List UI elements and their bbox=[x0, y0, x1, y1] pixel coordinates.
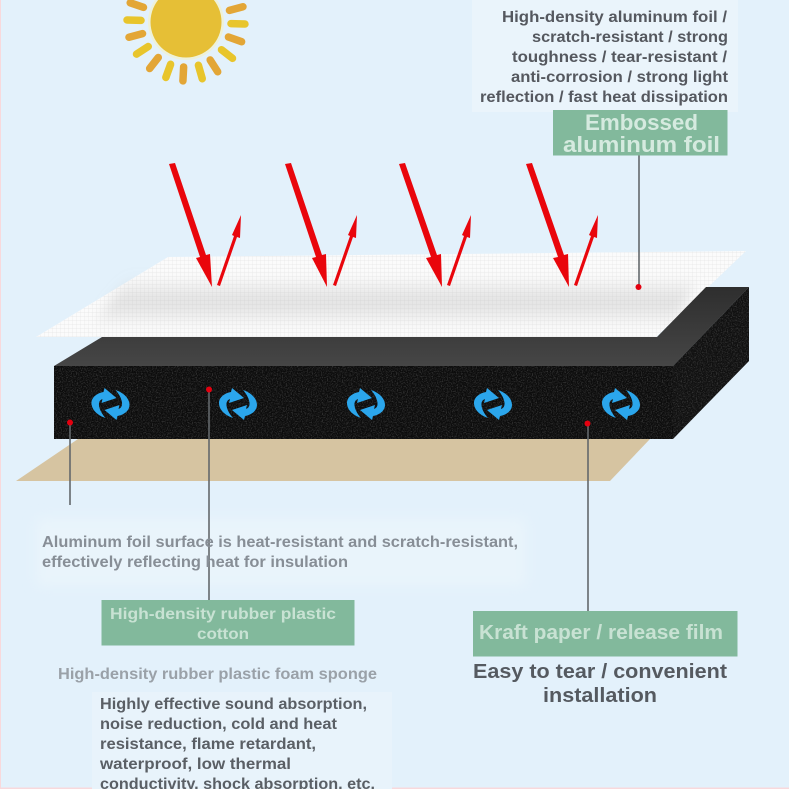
front face bbox=[54, 366, 673, 439]
label: high-density rubber plastic cotton bbox=[102, 600, 354, 646]
top face bbox=[54, 287, 749, 366]
kraft paper layer bbox=[16, 439, 650, 481]
text block: aluminum foil properties: toughness / tear-resistant / bbox=[512, 49, 728, 66]
foam block bbox=[54, 287, 749, 439]
panel: text backing middle bbox=[36, 518, 526, 586]
text block: foam sponge benefits: resistance, flame retardant, bbox=[100, 736, 316, 753]
text block: surface description: Aluminum foil surface is heat-resistant and scratch-resistant, bbox=[42, 534, 518, 551]
sun icon bbox=[127, 0, 245, 81]
circulation icons bbox=[92, 388, 640, 420]
label: high-density rubber plastic cotton: High-density rubber plastic bbox=[110, 606, 336, 623]
text block: installation: Easy to tear / convenient bbox=[473, 661, 727, 683]
marker dots bbox=[67, 284, 642, 426]
text block: aluminum foil properties: anti-corrosion / strong light bbox=[511, 69, 729, 86]
panel: text backing top right bbox=[472, 0, 738, 112]
right face bbox=[673, 287, 749, 439]
label: embossed aluminum foil bbox=[553, 110, 728, 157]
text block: foam sponge benefits: waterproof, low thermal bbox=[99, 756, 291, 773]
aluminum foil layer bbox=[36, 251, 746, 337]
leader lines bbox=[70, 155, 639, 611]
text block: foam sponge benefits bbox=[99, 696, 375, 789]
label: high-density rubber plastic cotton: cotton bbox=[197, 626, 249, 643]
text block: aluminum foil properties: High-density aluminum foil / bbox=[502, 9, 728, 26]
panel: text backing bottom bbox=[92, 692, 392, 789]
label: kraft paper: Kraft paper / release film bbox=[479, 622, 723, 644]
text block: installation: installation bbox=[543, 685, 657, 707]
text block: foam sponge benefits: Highly effective sound absorption, bbox=[100, 696, 367, 713]
label: embossed aluminum foil: Embossed bbox=[585, 110, 698, 135]
text block: foam sponge benefits: noise reduction, cold and heat bbox=[100, 716, 338, 733]
text block: surface description: effectively reflecting heat for insulation bbox=[42, 554, 348, 571]
text block: installation bbox=[473, 661, 727, 707]
label: embossed aluminum foil: aluminum foil bbox=[563, 132, 720, 157]
subheading: foam sponge: High-density rubber plastic foam sponge bbox=[58, 666, 377, 683]
text block: aluminum foil properties: scratch-resistant / strong bbox=[532, 29, 728, 46]
label: kraft paper bbox=[473, 611, 738, 656]
text block: aluminum foil properties bbox=[480, 9, 729, 106]
text block: surface description bbox=[42, 534, 518, 571]
text block: aluminum foil properties: reflection / fast heat dissipation bbox=[480, 89, 728, 106]
reflected and incident heat arrows bbox=[169, 163, 598, 287]
